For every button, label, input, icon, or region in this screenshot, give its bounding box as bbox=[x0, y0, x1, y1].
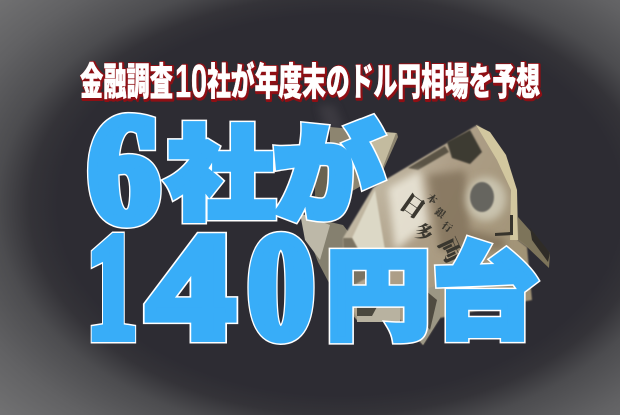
headline line 2: 140円台 bbox=[87, 204, 537, 370]
white outline: 台 bbox=[433, 212, 537, 359]
icon: crumpled banknote bbox=[300, 105, 550, 345]
red outline layer bbox=[81, 52, 541, 108]
icon: crumpled banknote: 多 bbox=[412, 217, 437, 246]
red outline layer: 金融調査 bbox=[81, 52, 174, 107]
white outline bbox=[87, 204, 537, 370]
icon: crumpled banknote: 銀 bbox=[432, 203, 449, 221]
blue fill bbox=[87, 204, 537, 370]
icon: crumpled banknote: 日 bbox=[394, 183, 434, 225]
white text layer: 金融調査 bbox=[80, 51, 173, 106]
blue fill: 4 bbox=[148, 204, 234, 370]
blue fill: 6 bbox=[88, 83, 160, 255]
blue fill: 台 bbox=[433, 212, 537, 359]
icon: crumpled banknote: 両 bbox=[432, 231, 474, 268]
white text layer: 10 bbox=[175, 55, 207, 107]
white outline: 円 bbox=[326, 217, 430, 359]
white text layer bbox=[80, 51, 540, 107]
blue fill bbox=[88, 83, 383, 255]
white outline: 6 bbox=[88, 83, 160, 255]
white outline: 社 bbox=[167, 94, 274, 239]
blue fill: 1 bbox=[87, 204, 137, 370]
heading: white subtitle with red outline bbox=[80, 51, 541, 108]
white outline bbox=[88, 83, 383, 255]
white outline: 4 bbox=[148, 204, 234, 370]
icon: crumpled banknote: 行 bbox=[439, 217, 456, 235]
blue fill: 0 bbox=[248, 204, 314, 370]
blue fill: 円 bbox=[326, 217, 430, 359]
red outline layer: 10 bbox=[176, 56, 208, 108]
blue fill: 社 bbox=[167, 94, 274, 239]
white outline: が bbox=[273, 89, 383, 243]
blue fill: が bbox=[273, 89, 383, 243]
white outline: 1 bbox=[87, 204, 137, 370]
headline line 1: 6社が bbox=[88, 83, 383, 255]
white outline: 0 bbox=[248, 204, 314, 370]
icon: crumpled banknote: 本 bbox=[424, 189, 441, 207]
